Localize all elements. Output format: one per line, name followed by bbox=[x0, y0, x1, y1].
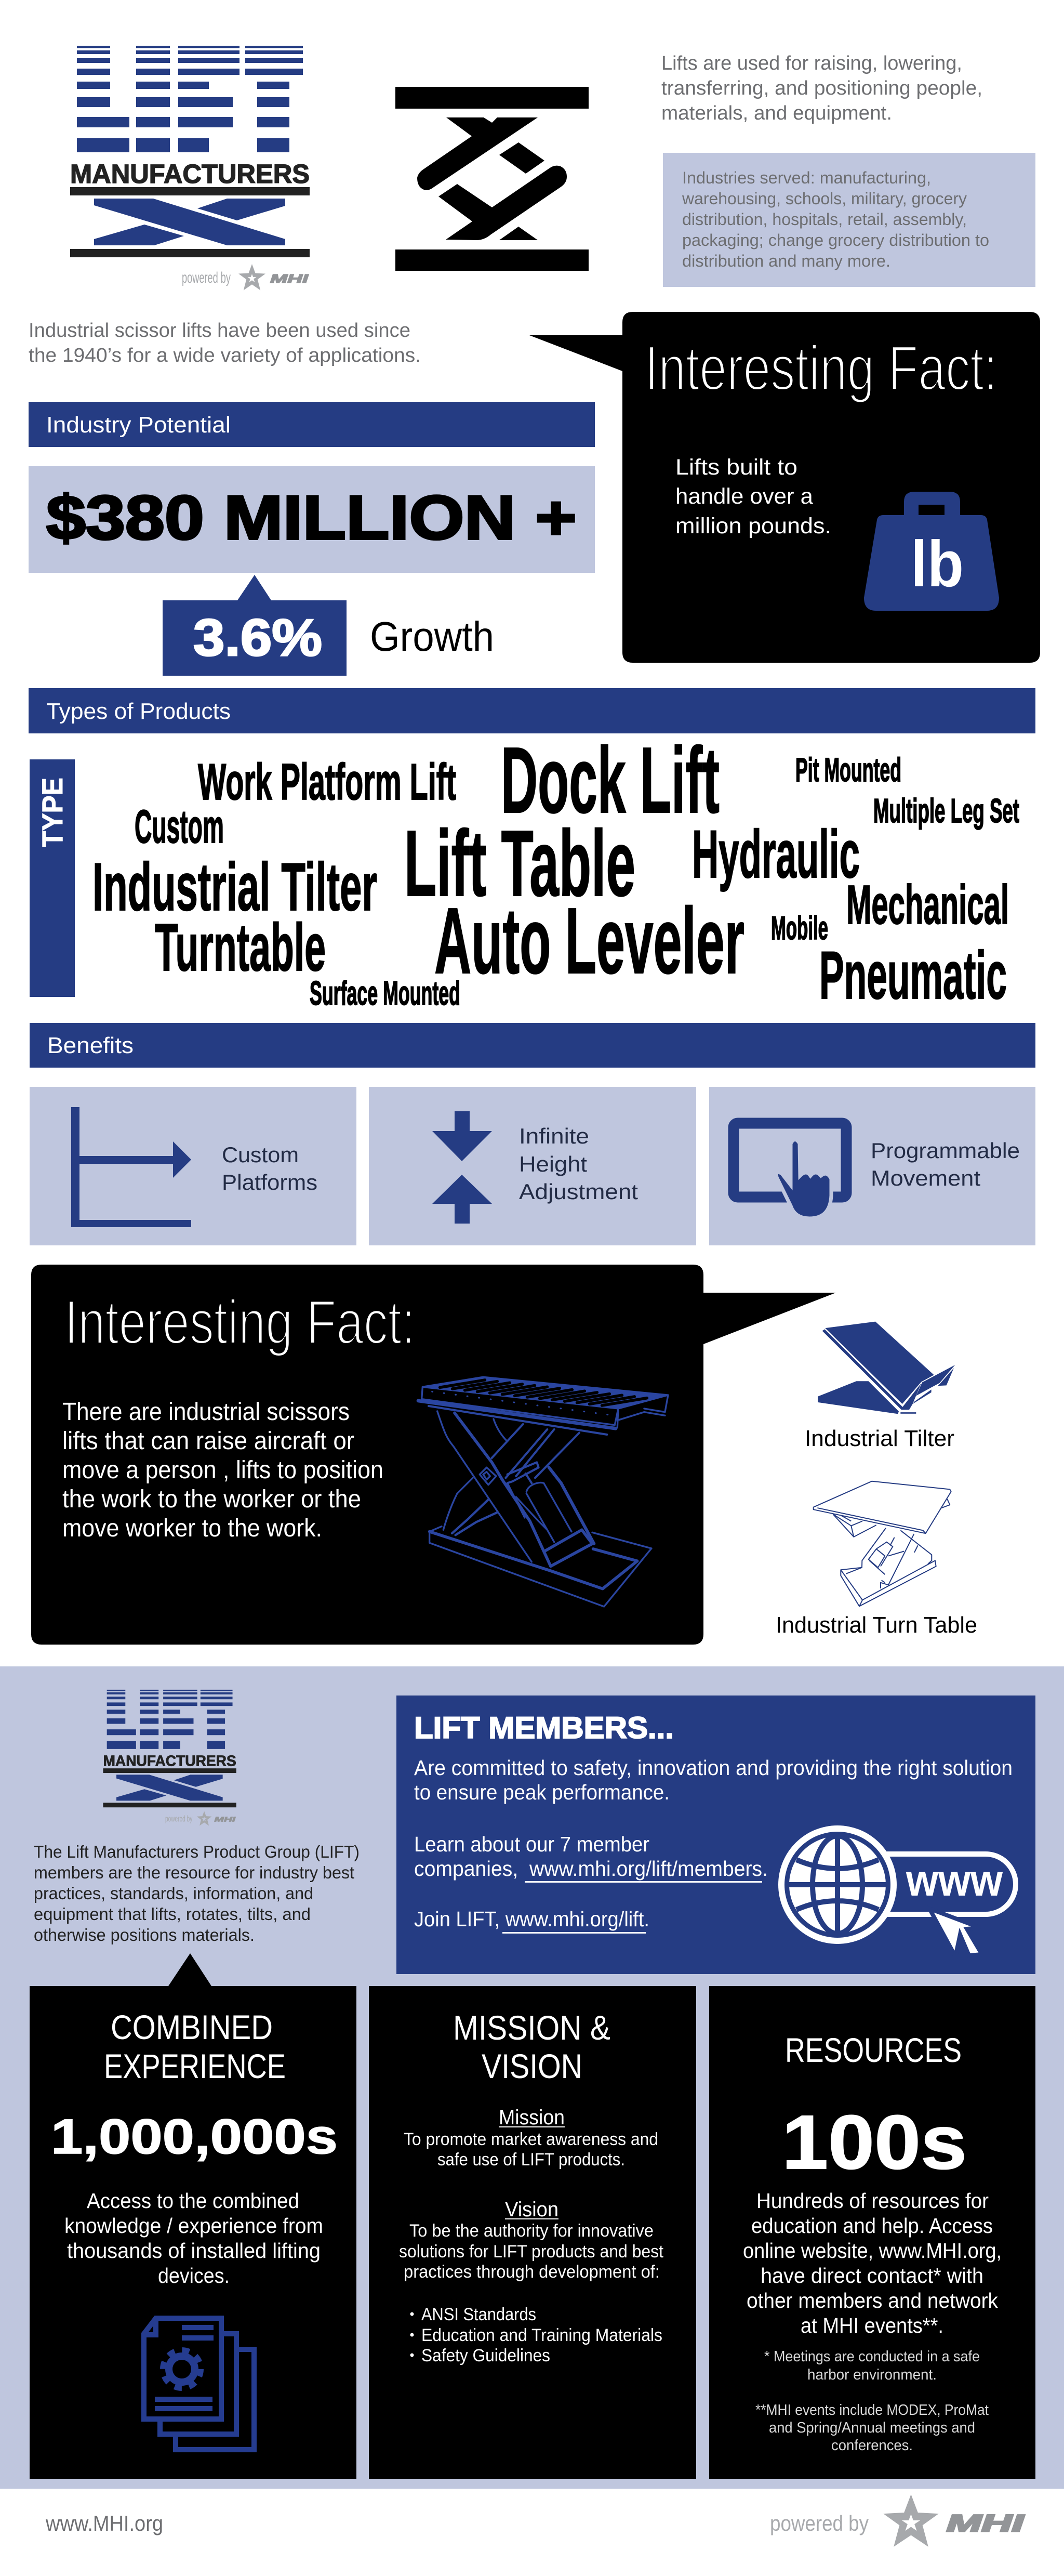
panel: resources: online website, www.MHI.org, bbox=[743, 2239, 1002, 2263]
text block: uses of lifts bbox=[661, 52, 982, 124]
footer: powered by MHI: MHI bbox=[947, 2510, 1025, 2536]
label: type bar bbox=[30, 759, 75, 997]
panel: resources: harbor environment. bbox=[807, 2367, 937, 2383]
icon: industrial turn table bbox=[814, 1481, 951, 1606]
word cloud: product types: Auto Leveler bbox=[434, 889, 744, 993]
panel: resources: at MHI events**. bbox=[801, 2314, 943, 2337]
panel: industries served: distribution and many more. bbox=[682, 252, 890, 270]
panel: market size bbox=[29, 466, 595, 573]
text block: scissor lift history: Industrial scissor lifts have been used since bbox=[29, 320, 410, 341]
panel: mission and vision bbox=[369, 1986, 696, 2479]
text block: LIFT description: otherwise positions materials. bbox=[34, 1925, 255, 1944]
panel: resources: 100s bbox=[782, 2100, 967, 2185]
panel: resources: Hundreds of resources for bbox=[756, 2189, 989, 2213]
panel: programmable movement: Programmable bbox=[871, 1138, 1020, 1163]
footer: powered by MHI bbox=[770, 2494, 1025, 2547]
panel: industries served: warehousing, schools, military, grocery bbox=[682, 189, 967, 208]
panel: resources: education and help. Access bbox=[751, 2214, 993, 2238]
panel: combined experience: thousands of installed lifting bbox=[67, 2239, 321, 2263]
word cloud: product types: Turntable bbox=[155, 910, 326, 985]
panel: LIFT members: Are committed to safety, innovation and providing the right solution bbox=[414, 1756, 1013, 1780]
text block: uses of lifts: transferring, and positioning people, bbox=[661, 77, 982, 99]
panel: mission and vision: MISSION & bbox=[453, 2008, 610, 2047]
footer: website: www.MHI.org bbox=[45, 2511, 163, 2535]
icon: globe with www bbox=[778, 1825, 1016, 1956]
panel: LIFT members band bbox=[0, 1666, 1064, 2489]
heading: types of products: Types of Products bbox=[46, 699, 231, 724]
panel: resources: conferences. bbox=[831, 2437, 913, 2454]
callout: interesting fact two: move a person , lifts to position bbox=[62, 1456, 383, 1484]
panel: resources: and Spring/Annual meetings and bbox=[769, 2420, 975, 2436]
logo: LIFT Manufacturers: MANUFACTURERS bbox=[70, 159, 310, 189]
panel: market size: $380 MILLION + bbox=[46, 483, 577, 553]
panel: infinite height adjustment bbox=[369, 1087, 696, 1245]
text block: LIFT description: members are the resource for industry best bbox=[34, 1863, 354, 1882]
panel: LIFT members: to ensure peak performance. bbox=[414, 1780, 670, 1804]
text block: LIFT description: equipment that lifts, rotates, tilts, and bbox=[34, 1904, 311, 1924]
panel: combined experience bbox=[30, 1986, 356, 2479]
word cloud: product types: Custom bbox=[135, 801, 224, 853]
text block: LIFT description: practices, standards, information, and bbox=[34, 1884, 313, 1903]
icon: documents with gear bbox=[144, 2318, 254, 2450]
word cloud: product types: Mobile bbox=[771, 910, 828, 947]
panel: custom platforms: Custom bbox=[222, 1142, 299, 1167]
text block: uses of lifts: Lifts are used for raising, lowering, bbox=[661, 52, 962, 74]
panel: resources: have direct contact* with bbox=[761, 2264, 983, 2288]
footer: powered by MHI: powered by bbox=[770, 2511, 869, 2535]
heading: types of products bbox=[29, 688, 1035, 733]
callout: interesting fact two: Interesting Fact: bbox=[64, 1287, 415, 1357]
callout: interesting fact two: There are industrial scissors bbox=[62, 1398, 350, 1426]
callout: interesting fact two: lifts that can raise aircraft or bbox=[62, 1427, 354, 1455]
logo: LIFT Manufacturers small bbox=[103, 1690, 236, 1825]
text block: uses of lifts: materials, and equipment. bbox=[661, 102, 892, 124]
word cloud: product types: Dock Lift bbox=[501, 728, 720, 833]
icon: globe with www: www bbox=[906, 1856, 1003, 1905]
panel: LIFT members: Learn about our 7 member bbox=[414, 1832, 649, 1856]
icon: industrial tilter bbox=[818, 1322, 955, 1414]
callout: growth: Growth bbox=[370, 613, 494, 660]
panel: resources: **MHI events include MODEX, ProMat bbox=[755, 2402, 989, 2419]
icon: platform arrow bbox=[71, 1107, 191, 1227]
panel: combined experience: devices. bbox=[158, 2264, 230, 2288]
callout: interesting fact one bbox=[529, 312, 1040, 663]
panel: combined experience: 1,000,000s bbox=[51, 2109, 338, 2164]
arrow: pointer to combined experience bbox=[168, 1953, 211, 1986]
icon: scissor lift emblem bbox=[395, 87, 589, 271]
panel: programmable movement: Movement bbox=[871, 1166, 980, 1190]
heading: benefits: Benefits bbox=[47, 1033, 134, 1058]
heading: benefits bbox=[30, 1023, 1035, 1068]
panel: mission and vision: safe use of LIFT products. bbox=[437, 2150, 625, 2170]
panel: mission and vision: practices through development of: bbox=[404, 2262, 660, 2282]
word cloud: product types: Industrial Tilter bbox=[92, 849, 377, 925]
word cloud: product types: Hydraulic bbox=[692, 816, 860, 892]
word cloud: product types: Work Platform Lift bbox=[198, 753, 456, 810]
heading: industry potential bbox=[29, 402, 595, 447]
panel: combined experience: COMBINED bbox=[111, 2008, 273, 2046]
callout: interesting fact one: handle over a bbox=[675, 484, 813, 509]
icon: weight bbox=[864, 492, 999, 611]
panel: custom platforms bbox=[30, 1087, 356, 1245]
panel: resources: * Meetings are conducted in a safe bbox=[764, 2348, 980, 2365]
panel: mission and vision: Vision bbox=[505, 2198, 558, 2221]
panel: infinite height adjustment: Height bbox=[519, 1152, 587, 1176]
icon: touch tablet bbox=[734, 1123, 846, 1218]
panel: mission and vision: solutions for LIFT products and best bbox=[399, 2242, 664, 2262]
text block: scissor lift history bbox=[29, 320, 421, 366]
panel: mission and vision: Mission bbox=[499, 2106, 565, 2129]
logo: LIFT Manufacturers bbox=[70, 46, 310, 290]
panel: mission and vision: Education and Training Materials bbox=[421, 2325, 662, 2345]
callout: growth bbox=[163, 575, 494, 676]
text block: LIFT description bbox=[34, 1842, 360, 1944]
icon: up and down arrows bbox=[432, 1111, 492, 1224]
panel: industries served: packaging; change grocery distribution to bbox=[682, 231, 989, 249]
logo: LIFT Manufacturers: MHI bbox=[270, 272, 309, 285]
label: industrial turn table: Industrial Turn Table bbox=[776, 1612, 977, 1638]
panel: LIFT members: Join LIFT, www.mhi.org/lift. bbox=[414, 1907, 649, 1931]
word cloud: product types: Lift Table bbox=[404, 811, 635, 916]
text block: LIFT description: The Lift Manufacturers Product Group (LIFT) bbox=[34, 1842, 360, 1861]
panel: resources bbox=[709, 1986, 1035, 2479]
panel: infinite height adjustment: Adjustment bbox=[519, 1179, 638, 1204]
callout: growth: 3.6% bbox=[193, 609, 322, 667]
panel: industries served: Industries served: manufacturing, bbox=[682, 168, 931, 187]
panel: LIFT members: LIFT MEMBERS... bbox=[414, 1711, 674, 1745]
panel: combined experience: EXPERIENCE bbox=[104, 2047, 286, 2085]
logo: LIFT Manufacturers small: MANUFACTURERS bbox=[103, 1753, 236, 1770]
word cloud: product types: Surface Mounted bbox=[310, 974, 460, 1012]
callout: interesting fact one: Lifts built to bbox=[675, 455, 797, 480]
callout: interesting fact two bbox=[31, 1265, 836, 1645]
word cloud: product types bbox=[92, 728, 1019, 1013]
panel: mission and vision: ANSI Standards bbox=[421, 2305, 536, 2324]
word cloud: product types: Pit Mounted bbox=[795, 751, 901, 788]
icon: scissor lift line art bbox=[418, 1377, 668, 1607]
label: industrial tilter: Industrial Tilter bbox=[805, 1426, 954, 1451]
callout: interesting fact two: move worker to the work. bbox=[62, 1515, 322, 1542]
panel: resources: other members and network bbox=[747, 2289, 998, 2312]
callout: interesting fact two: the work to the worker or the bbox=[62, 1486, 361, 1513]
panel: custom platforms: Platforms bbox=[222, 1170, 317, 1194]
panel: LIFT members bbox=[396, 1696, 1035, 1974]
panel: mission and vision: To promote market awareness and bbox=[404, 2130, 658, 2149]
logo: LIFT Manufacturers small: powered by bbox=[165, 1813, 193, 1823]
panel: mission and vision: VISION bbox=[482, 2047, 582, 2085]
icon: weight: lb bbox=[911, 528, 964, 600]
logo: LIFT Manufacturers small: MHI bbox=[215, 1815, 236, 1823]
panel: LIFT members: companies, www.mhi.org/lift/members. bbox=[414, 1857, 768, 1881]
panel: industries served bbox=[663, 153, 1035, 287]
panel: infinite height adjustment: Infinite bbox=[519, 1124, 589, 1148]
panel: combined experience: Access to the combined bbox=[87, 2189, 299, 2213]
logo: LIFT Manufacturers: powered by bbox=[182, 269, 231, 286]
text block: scissor lift history: the 1940’s for a wide variety of applications. bbox=[29, 345, 421, 366]
panel: industries served: distribution, hospitals, retail, assembly, bbox=[682, 210, 967, 229]
panel: combined experience: knowledge / experience from bbox=[64, 2214, 323, 2238]
panel: mission and vision: To be the authority for innovative bbox=[409, 2221, 654, 2241]
panel: resources: RESOURCES bbox=[785, 2031, 962, 2069]
heading: industry potential: Industry Potential bbox=[46, 412, 231, 438]
label: type bar: TYPE bbox=[36, 778, 69, 847]
callout: interesting fact one: million pounds. bbox=[675, 514, 831, 538]
panel: programmable movement bbox=[709, 1087, 1035, 1245]
panel: mission and vision: Safety Guidelines bbox=[421, 2346, 550, 2365]
